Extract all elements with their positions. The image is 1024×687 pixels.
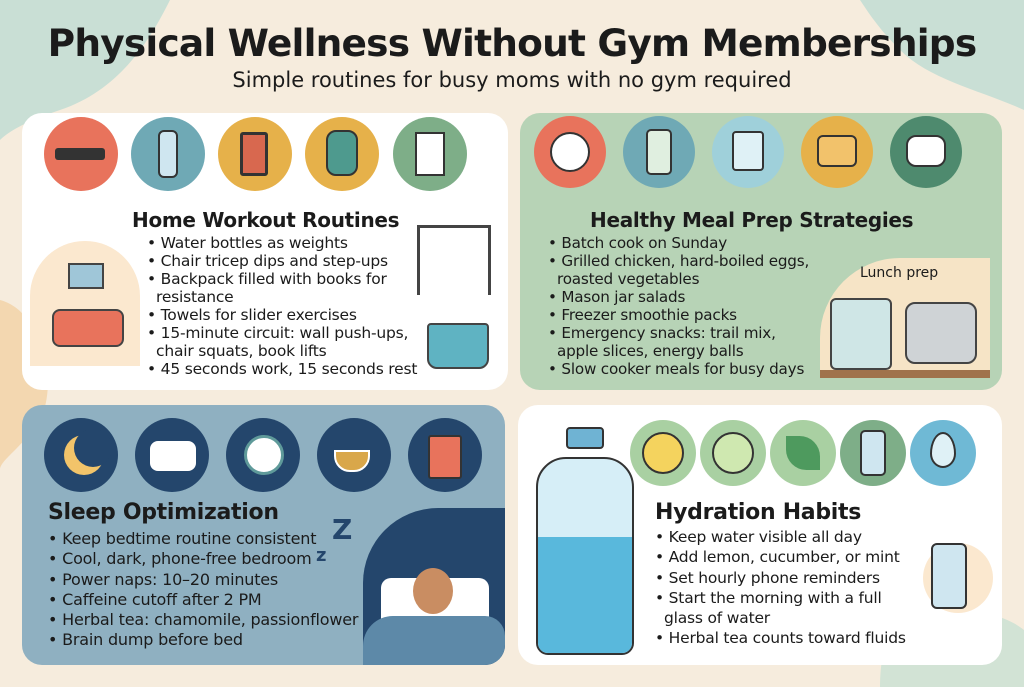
illustration: monkey bars <box>417 225 491 295</box>
icons row <box>44 117 467 191</box>
panel: sleep: z <box>316 545 326 566</box>
zzz: Z <box>332 513 352 546</box>
illustration: water bottle <box>536 427 634 655</box>
subtitle: Simple routines for busy moms with no gym required <box>232 68 792 92</box>
bullets <box>50 529 358 649</box>
bullets: roasted vegetables <box>557 270 699 288</box>
icons row <box>534 116 962 188</box>
bullets: 45 seconds work, 15 seconds rest <box>161 360 417 378</box>
heading: Home Workout Routines <box>132 208 399 232</box>
bullets: Freezer smoothie packs <box>561 306 737 324</box>
illustration: phone reminder <box>923 543 993 613</box>
illustration: living room <box>30 241 140 366</box>
bullets <box>550 234 809 378</box>
bullets <box>657 528 906 647</box>
bullets: apple slices, energy balls <box>557 342 743 360</box>
bullets: Emergency snacks: trail mix, <box>561 324 776 342</box>
panel: meal prep <box>520 113 1002 390</box>
bullets: Keep water visible all day <box>669 528 862 546</box>
bullets: Chair tricep dips and step-ups <box>161 252 388 270</box>
bullets: Add lemon, cucumber, or mint <box>669 548 900 566</box>
bullets: Mason jar salads <box>561 288 685 306</box>
icons row <box>630 420 976 486</box>
bullets: Slow cooker meals for busy days <box>561 360 804 378</box>
icons row <box>44 418 482 492</box>
bullets: Set hourly phone reminders <box>669 569 880 587</box>
heading: Sleep Optimization <box>48 500 279 525</box>
bullets: Batch cook on Sunday <box>561 234 727 252</box>
bullets: Herbal tea counts toward fluids <box>669 629 906 647</box>
bullets <box>149 234 418 378</box>
illustration: lunch prep: Lunch prep <box>860 265 938 281</box>
bullets: Backpack filled with books for <box>161 270 387 288</box>
panel: hydration <box>518 405 1002 665</box>
bullets: Cool, dark, phone-free bedroom <box>62 549 312 568</box>
illustration: lunch prep <box>820 258 990 378</box>
bullets: Grilled chicken, hard-boiled eggs, <box>561 252 809 270</box>
panel: sleep <box>22 405 505 665</box>
bullets: Keep bedtime routine consistent <box>62 529 316 548</box>
title: Physical Wellness Without Gym Memberships <box>48 21 976 65</box>
panel: home workout <box>22 113 508 390</box>
illustration: laundry basket <box>427 323 489 369</box>
bullets: Water bottles as weights <box>161 234 348 252</box>
heading: Hydration Habits <box>655 500 861 525</box>
bullets: glass of water <box>664 609 770 627</box>
heading: Healthy Meal Prep Strategies <box>590 208 913 232</box>
bullets: Caffeine cutoff after 2 PM <box>62 590 262 609</box>
bullets: Herbal tea: chamomile, passionflower <box>62 610 358 629</box>
bullets: chair squats, book lifts <box>156 342 327 360</box>
bullets: resistance <box>156 288 233 306</box>
bullets: 15-minute circuit: wall push-ups, <box>161 324 408 342</box>
illustration: sleeping mom <box>363 508 505 665</box>
bullets: Start the morning with a full <box>669 589 882 607</box>
bullets: Brain dump before bed <box>62 630 243 649</box>
bullets: Towels for slider exercises <box>161 306 357 324</box>
bullets: Power naps: 10–20 minutes <box>62 570 278 589</box>
